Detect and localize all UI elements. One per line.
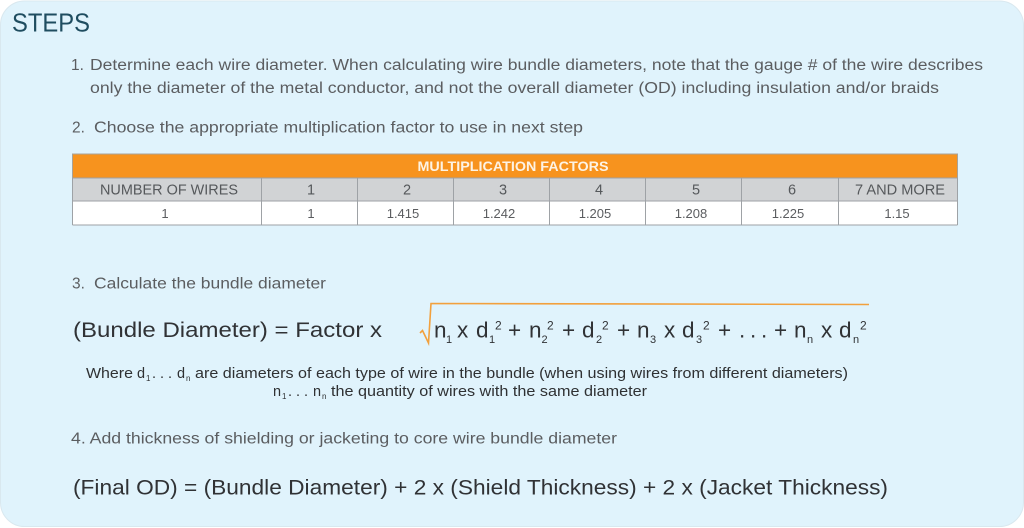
table header row: 1: [307, 182, 315, 198]
formula notes: [86, 366, 848, 401]
formula terms under the radical: n: [529, 318, 542, 342]
formula terms under the radical: d: [476, 318, 489, 342]
formula terms under the radical: d: [682, 318, 695, 342]
step 4 text: 4. Add thickness of shielding or jacketing to core wire bundle diameter: [71, 430, 617, 448]
table header row: 3: [499, 182, 507, 198]
formula notes: the quantity of wires with the same diameter: [331, 384, 647, 400]
formula terms under the radical: .: [739, 318, 745, 342]
formula terms under the radical: n: [434, 318, 447, 342]
table data row: 1.415: [387, 206, 419, 221]
table header row: 6: [788, 182, 796, 198]
formula terms under the radical: .: [750, 318, 756, 342]
formula notes: .: [168, 366, 172, 382]
formula terms under the radical: 1: [489, 334, 495, 346]
formula terms under the radical: +: [718, 318, 731, 342]
formula: bundle diameter: [73, 304, 869, 346]
formula terms under the radical: .: [761, 318, 767, 342]
formula terms under the radical: 2: [542, 334, 548, 346]
table header row: [72, 178, 958, 201]
table title bar: MULTIPLICATION FACTORS: [418, 158, 608, 174]
formula terms under the radical: n: [794, 318, 807, 342]
step 1 text: 1.: [71, 57, 84, 74]
formula terms under the radical: [434, 318, 867, 346]
formula terms under the radical: +: [774, 318, 787, 342]
formula notes: n: [322, 392, 326, 401]
formula terms under the radical: n: [807, 334, 813, 346]
formula notes: .: [152, 366, 156, 382]
formula notes: 1: [282, 392, 287, 401]
formula notes: are diameters of each type of wire in the bundle (when using wires from different diameters): [195, 366, 848, 382]
formula terms under the radical: x: [664, 318, 676, 342]
formula: final OD: (Final OD) = (Bundle Diameter) + 2 x (Shield Thickness) + 2 x (Jacket Thickness): [73, 476, 888, 500]
step 1 text: Determine each wire diameter. When calculating wire bundle diameters, note that the gauge # of the wire describes: [90, 57, 983, 74]
table data row: 1.208: [675, 206, 707, 221]
radical sign: [420, 304, 869, 343]
formula notes: .: [160, 366, 164, 382]
step 3 text: 3.: [72, 276, 85, 292]
formula terms under the radical: n: [853, 334, 859, 346]
title: STEPS: [12, 10, 90, 38]
formula terms under the radical: 2: [596, 334, 602, 346]
formula terms under the radical: +: [617, 318, 630, 342]
formula terms under the radical: +: [562, 318, 575, 342]
table data row: 1.225: [772, 206, 804, 221]
formula terms under the radical: 2: [860, 318, 867, 332]
step 2 text: Choose the appropriate multiplication factor to use in next step: [94, 120, 583, 136]
formula terms under the radical: 2: [495, 318, 502, 332]
formula terms under the radical: d: [839, 318, 852, 342]
formula: bundle diameter: (Bundle Diameter) = Factor x: [73, 319, 383, 342]
table data row: [72, 201, 958, 225]
table title bar: [72, 154, 958, 178]
table header row: 4: [595, 182, 603, 198]
step 2 text: 2.: [72, 120, 85, 136]
formula terms under the radical: +: [508, 318, 521, 342]
formula notes: .: [296, 384, 300, 400]
formula terms under the radical: 3: [696, 334, 702, 346]
step 1 text: [71, 57, 983, 97]
table header row: NUMBER OF WIRES: [100, 182, 238, 198]
table data row: 1: [307, 206, 315, 221]
table data row: 1: [161, 206, 169, 221]
table header row: 2: [403, 182, 411, 198]
step 1 text: only the diameter of the metal conductor, and not the overall diameter (OD) including insulation and/or braids: [90, 80, 939, 97]
table header row: 7 AND MORE: [855, 182, 945, 198]
table header row: 5: [692, 182, 700, 198]
formula notes: d: [137, 366, 145, 382]
formula notes: 1: [146, 374, 151, 383]
formula notes: d: [177, 366, 185, 382]
table data row: 1.205: [579, 206, 611, 221]
table data row: 1.242: [483, 206, 515, 221]
formula terms under the radical: x: [821, 318, 833, 342]
table data row: 1.15: [884, 206, 910, 221]
formula notes: .: [304, 384, 308, 400]
formula notes: n: [313, 384, 321, 400]
formula notes: n: [186, 374, 190, 383]
step 3 text: Calculate the bundle diameter: [94, 276, 326, 292]
formula terms under the radical: x: [457, 318, 469, 342]
formula terms under the radical: 2: [547, 318, 554, 332]
formula terms under the radical: n: [637, 318, 650, 342]
formula notes: .: [288, 384, 292, 400]
formula terms under the radical: d: [582, 318, 595, 342]
formula terms under the radical: 1: [446, 334, 452, 346]
formula notes: Where: [86, 366, 133, 382]
table: multiplication factors: [72, 154, 958, 225]
formula notes: n: [273, 384, 281, 400]
formula terms under the radical: 2: [703, 318, 710, 332]
formula terms under the radical: 2: [602, 318, 609, 332]
formula terms under the radical: 3: [650, 334, 656, 346]
